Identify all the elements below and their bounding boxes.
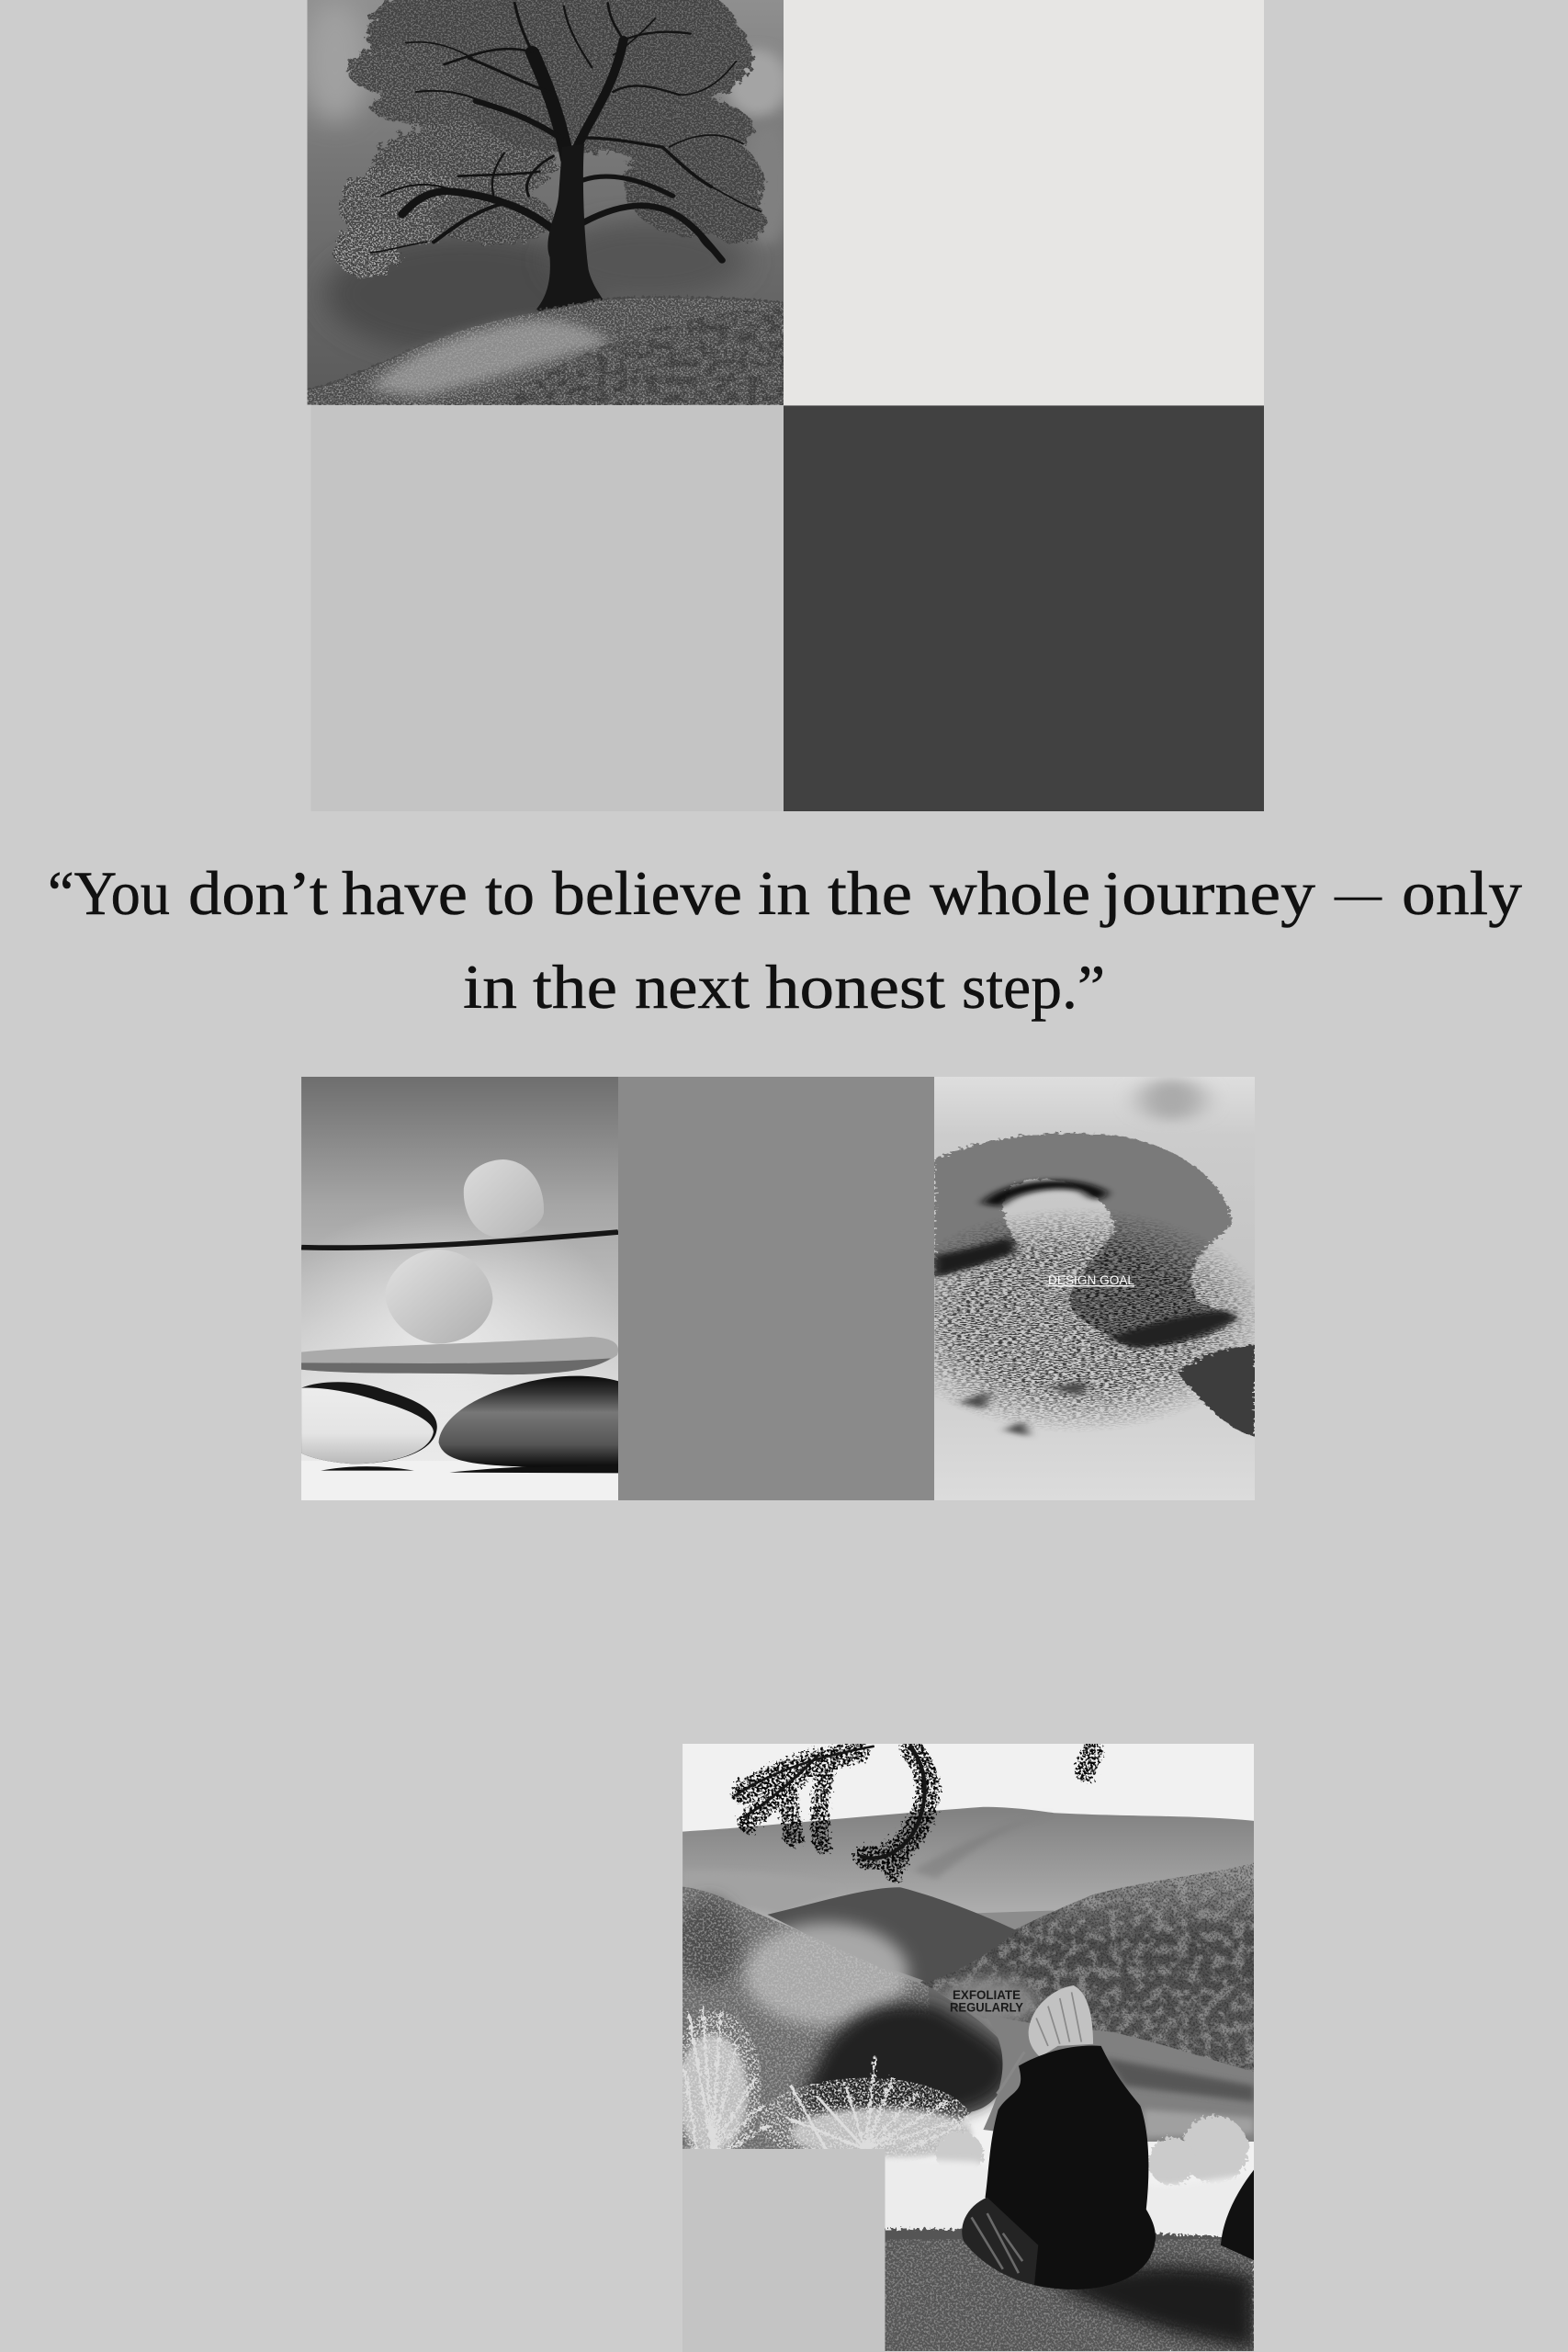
quote line 2: in	[463, 952, 517, 1022]
tree branches	[742, 1749, 1093, 1872]
right forest slope	[920, 1862, 1254, 2082]
photo label: design goal: DESIGN GOAL	[1048, 1272, 1134, 1287]
panel: top colour-block grid	[310, 0, 1264, 811]
quote line 2: the	[533, 952, 617, 1022]
photo label: exfoliate regularly	[950, 1987, 1024, 2014]
quote line 1: don’t	[188, 858, 328, 928]
photo label: exfoliate regularly: REGULARLY	[950, 1999, 1024, 2014]
quote line 1	[48, 858, 1522, 928]
quote line 2: next	[635, 952, 750, 1022]
stone: dark right	[439, 1376, 618, 1467]
backpack	[1221, 2169, 1254, 2260]
bright clearing	[682, 2150, 1254, 2233]
person	[962, 1985, 1156, 2290]
quote line 1: “You	[48, 858, 170, 928]
block: charcoal square	[784, 406, 1264, 811]
quote line 1: only	[1402, 858, 1522, 928]
foliage highlights	[333, 0, 766, 277]
tree trunk and branches	[370, 3, 761, 260]
question mark stitching	[934, 1133, 1236, 1348]
quote line 2: step.”	[962, 952, 1105, 1022]
quote line 1: to	[485, 858, 535, 928]
stone: egg	[385, 1250, 492, 1344]
knit ground texture	[934, 1209, 1255, 1431]
quote text	[48, 858, 1522, 1022]
photo: woven question mark	[934, 1077, 1256, 1500]
floor	[301, 1461, 302, 1479]
photo: lone oak tree on hill	[300, 0, 793, 405]
photo label: exfoliate regularly: EXFOLIATE	[953, 1987, 1021, 2002]
block: gray overlay square	[682, 2149, 886, 2352]
stone: top pebble	[464, 1159, 544, 1238]
stone: pale left	[301, 1382, 437, 1464]
quote line 1: in	[758, 858, 810, 928]
valley fill	[899, 1911, 1055, 2038]
tree canopy	[333, 0, 766, 277]
photo: balancing stones	[301, 1077, 618, 1500]
quote line 2	[463, 952, 1105, 1022]
question mark dot	[1178, 1344, 1256, 1436]
quote line 1: the	[828, 858, 912, 928]
stone: flat slab	[301, 1337, 618, 1374]
twig	[301, 1232, 618, 1248]
jacket	[986, 2046, 1156, 2290]
quote line 1: believe	[552, 858, 742, 928]
centre dark hill	[767, 1887, 1017, 1983]
frosted bushes	[677, 2034, 972, 2160]
quote line 1: have	[342, 858, 468, 928]
hillside	[307, 297, 784, 405]
river	[983, 2012, 1254, 2142]
sky	[682, 1744, 1254, 2352]
quote line 2: honest	[765, 952, 945, 1022]
block: cream square	[784, 0, 1264, 405]
block: light gray square	[310, 405, 784, 811]
grass foreground	[682, 2229, 1254, 2352]
quote line 1: journey	[1100, 858, 1315, 928]
quote line 1: whole	[930, 858, 1090, 928]
photo: person overlooking mountain valley	[671, 1744, 1254, 2352]
hair	[997, 2052, 1024, 2094]
legs	[962, 2198, 1038, 2285]
far ridge	[682, 1806, 1254, 1931]
quote line 1: —	[1334, 868, 1382, 920]
block: mid gray column	[618, 1077, 934, 1500]
beanie	[1029, 1985, 1093, 2057]
left hill	[682, 1886, 1010, 2150]
